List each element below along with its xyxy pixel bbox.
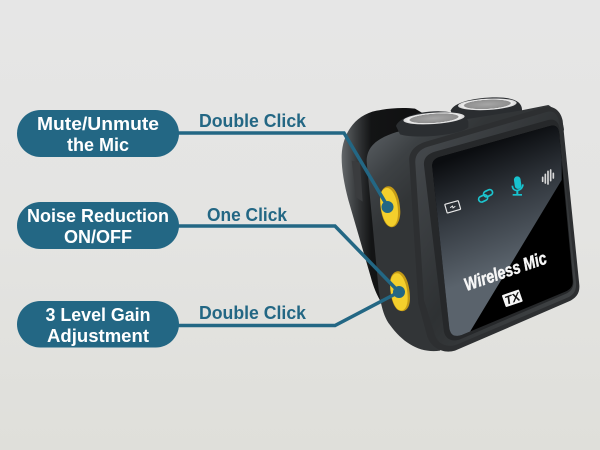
infographic [17,97,580,352]
device label: Wireless Mic: Wireless Mic [461,248,549,295]
connector dot: top button [382,201,394,213]
pill: Mute/Unmute the Mic: the Mic [67,134,129,155]
device screen [430,120,573,338]
label: One Click: One Click [207,204,288,225]
device front rim [409,107,579,352]
pill: 3 Level Gain Adjustment: Adjustment [47,325,149,346]
pill: Noise Reduction ON/OFF: ON/OFF [64,226,132,247]
yellow button 2 [390,271,410,311]
connector line: gain [175,292,399,326]
microphone capsule rear [451,97,522,122]
connector line: mute [175,133,388,207]
pill: Noise Reduction ON/OFF: Noise Reduction [27,205,169,226]
microphone capsule front [396,111,468,136]
icon: sound wave [543,170,553,184]
icon: link [477,189,495,203]
label: Double Click (bottom): Double Click [199,302,307,323]
device side body [367,105,564,351]
connector line: noise reduction [175,226,399,292]
device: wireless mic transmitter [342,97,579,352]
device clip [342,108,440,320]
device clip slot [352,161,363,202]
pill: Noise Reduction ON/OFF [17,202,179,249]
yellow button 1 [380,186,400,227]
pill: Mute/Unmute the Mic: Mute/Unmute [37,113,159,134]
icon: battery [445,201,461,213]
icon: microphone [512,176,523,196]
device label: TX badge: TX [503,289,523,308]
pill: 3 Level Gain Adjustment [17,301,179,348]
label: Double Click (top): Double Click [199,110,307,131]
pill: Mute/Unmute the Mic [17,110,179,157]
connector dot: lower button [393,286,405,298]
pill: 3 Level Gain Adjustment: 3 Level Gain [46,304,150,325]
